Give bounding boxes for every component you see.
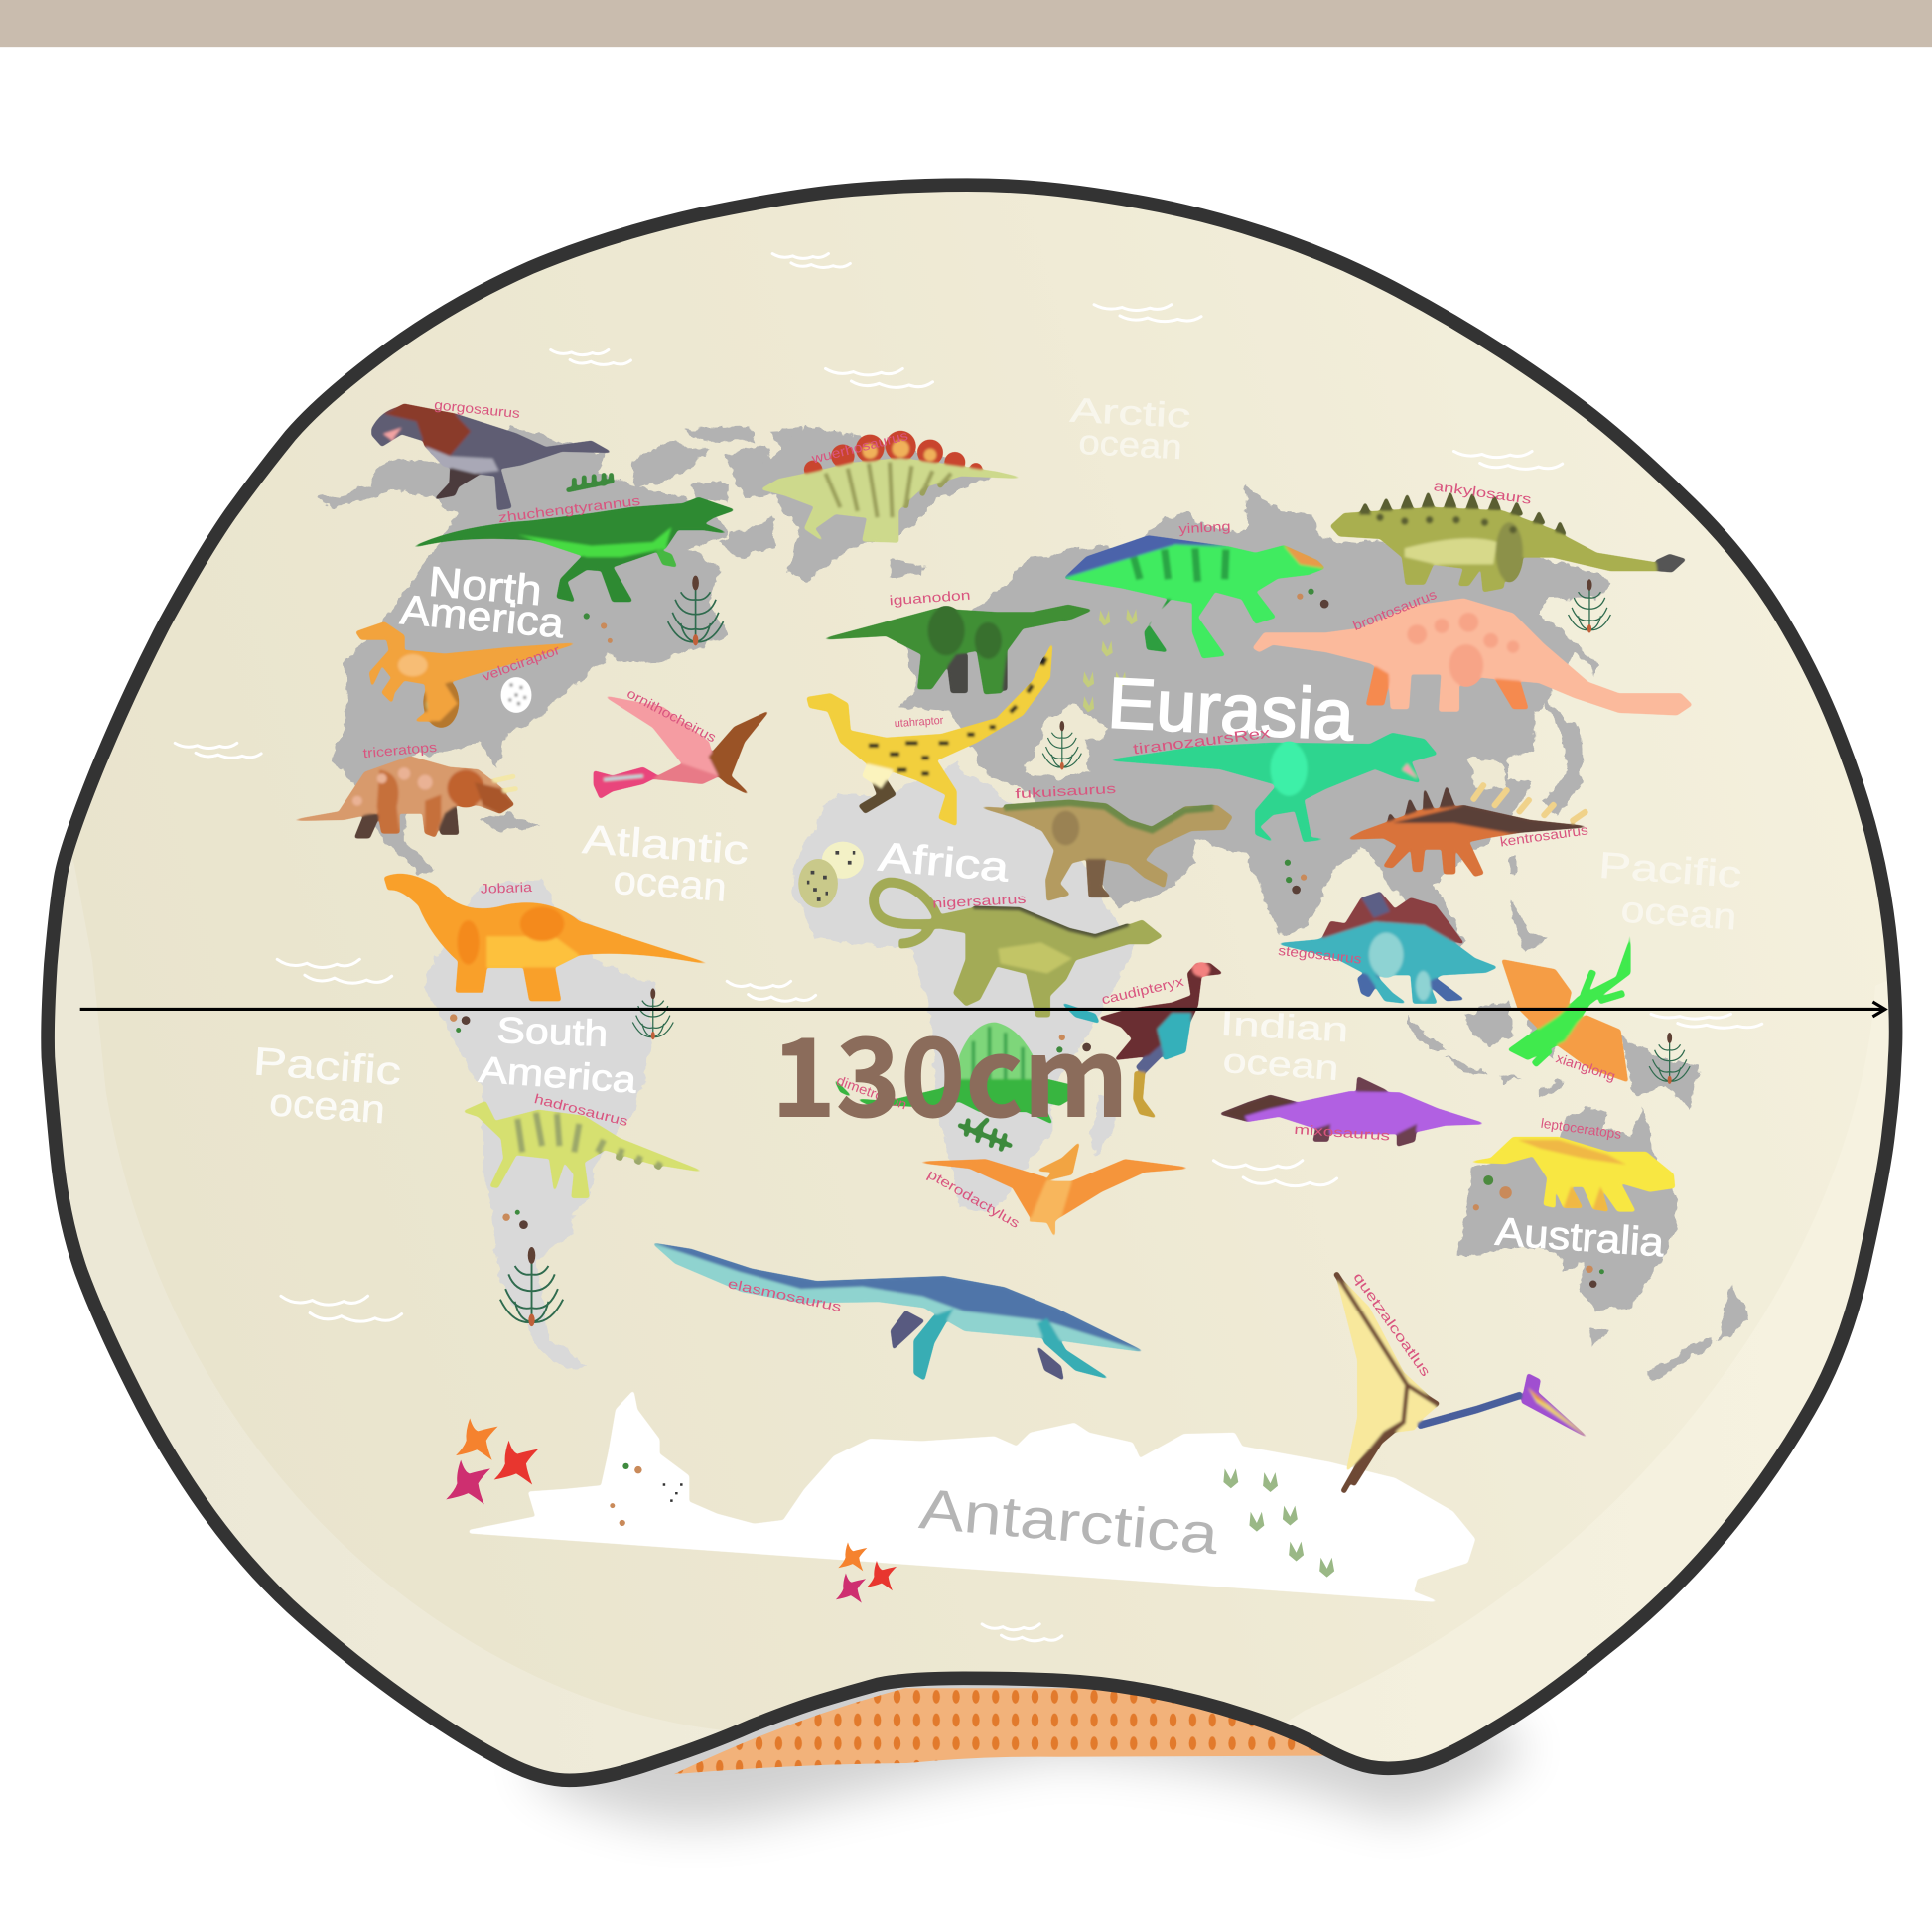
footprints on Eurasia bbox=[1083, 609, 1138, 712]
dinosaur name labels: xianglong bbox=[1554, 1050, 1617, 1084]
dinosaur name labels: hadrosaurus bbox=[533, 1091, 629, 1129]
quetzalcoatlus bbox=[1335, 1273, 1588, 1492]
ankylosaurus bbox=[1330, 491, 1686, 592]
dinosaur name labels: velociraptor bbox=[481, 642, 562, 684]
South East Asia islands bbox=[1406, 986, 1563, 1099]
continent labels: North bbox=[427, 558, 544, 614]
continent labels bbox=[398, 558, 1666, 1567]
diameter arrow bbox=[80, 1002, 1885, 1017]
North America bbox=[314, 425, 730, 874]
ocean labels: ocean bbox=[612, 857, 728, 910]
leptoceratops bbox=[1468, 1138, 1675, 1211]
caudipteryx bbox=[1062, 963, 1222, 1118]
ornithocheirus bbox=[594, 696, 768, 798]
starfish cluster left bbox=[446, 1418, 538, 1504]
dinosaur name labels: stegosaurus bbox=[1278, 943, 1362, 967]
ocean labels: Arctic bbox=[1069, 391, 1191, 436]
utahraptor bbox=[807, 643, 1052, 826]
wuerhosaurus bbox=[761, 431, 1023, 542]
dinosaur name labels: wuerhosaurus bbox=[809, 428, 909, 467]
zhuchengtyrannus bbox=[410, 497, 735, 602]
nigersaurus bbox=[874, 883, 1162, 1017]
iguanodon bbox=[822, 605, 1092, 694]
dinosaur name labels: dimetrodon bbox=[834, 1073, 909, 1112]
ocean labels: Pacific bbox=[1597, 844, 1743, 896]
dimetrodon bbox=[834, 1023, 1074, 1124]
continent labels: Australia bbox=[1494, 1210, 1666, 1265]
dinosaur name labels: nigersaurus bbox=[932, 892, 1027, 911]
South America bbox=[425, 879, 655, 1370]
New Guinea bbox=[1621, 1037, 1699, 1108]
dinosaur name labels: tiranozaursRex bbox=[1132, 726, 1272, 759]
mat drop shadow bbox=[530, 1601, 1528, 1824]
dinosaur name labels: gorgosaurus bbox=[434, 397, 521, 421]
starfish cluster centre bbox=[836, 1542, 897, 1603]
jobaria bbox=[384, 874, 712, 1001]
horsetail plants bbox=[500, 576, 1690, 1326]
ocean labels: Atlantic bbox=[581, 816, 751, 873]
Antarctica bbox=[470, 1391, 1475, 1601]
dinosaur name labels: pterodactylus bbox=[925, 1167, 1023, 1231]
dinosaur name labels: mixosaurus bbox=[1294, 1122, 1391, 1144]
Madagascar bbox=[1092, 1095, 1119, 1157]
fern above North America bbox=[567, 474, 614, 490]
Iceland bbox=[891, 559, 924, 577]
ocean waves bbox=[175, 254, 1762, 1641]
Eurasia bbox=[900, 486, 1610, 973]
continent labels: Eurasia bbox=[1106, 663, 1357, 756]
Australia bbox=[1458, 1106, 1678, 1311]
small fern on Africa bbox=[959, 1119, 1012, 1151]
fukuisaurus bbox=[980, 801, 1232, 900]
hadrosaurus bbox=[464, 1102, 704, 1197]
brontosaurus bbox=[1253, 599, 1692, 715]
mixosaurus bbox=[1220, 1077, 1484, 1146]
dinosaur name labels: kentrosaurus bbox=[1499, 822, 1589, 850]
dinosaur name labels: leptoceratops bbox=[1540, 1116, 1622, 1142]
round mat bbox=[55, 192, 1889, 1773]
size label 130cm: 130cm bbox=[771, 991, 1129, 1148]
ocean labels: Pacific bbox=[252, 1039, 402, 1094]
pterodactylus bbox=[916, 1142, 1190, 1237]
ocean labels: ocean bbox=[1619, 888, 1738, 937]
xianglong bbox=[1502, 926, 1630, 1082]
top beige band bbox=[0, 0, 1932, 47]
dinosaur name labels: triceratops bbox=[362, 740, 438, 760]
orange underside of the mat bbox=[674, 1688, 1330, 1774]
continent labels: Africa bbox=[877, 833, 1011, 891]
continent labels: Antarctica bbox=[916, 1477, 1221, 1567]
dinosaur name labels: brontosaurus bbox=[1351, 587, 1439, 633]
ocean labels: Indian bbox=[1219, 1006, 1349, 1049]
kentrosaurus bbox=[1348, 783, 1588, 876]
eggs near Africa bbox=[798, 842, 864, 908]
Caribbean islands bbox=[481, 813, 543, 830]
dinosaur name labels: iguanodon bbox=[889, 588, 971, 608]
inland seas bbox=[1023, 705, 1506, 788]
stegosaurus bbox=[1278, 893, 1497, 1003]
continent labels: South bbox=[496, 1009, 609, 1054]
yinlong bbox=[1064, 536, 1324, 658]
mat black border bbox=[48, 185, 1896, 1780]
dinosaur name labels: ornithocheirus bbox=[624, 686, 719, 746]
dinosaur name labels: elasmosaurus bbox=[727, 1276, 843, 1314]
dinosaur name labels: fukuisaurus bbox=[1015, 781, 1117, 801]
dinosaur name labels: yinlong bbox=[1178, 519, 1231, 536]
New Zealand and Tasmania bbox=[1589, 1285, 1751, 1380]
continent labels: America bbox=[478, 1048, 638, 1101]
triceratops bbox=[291, 757, 517, 838]
ocean labels: ocean bbox=[1078, 424, 1183, 467]
elasmosaurus bbox=[653, 1243, 1144, 1380]
dinosaur name labels: Jobaria bbox=[481, 880, 533, 897]
map land bbox=[314, 425, 1751, 1380]
dinosaur name labels bbox=[362, 397, 1622, 1379]
ocean labels: ocean bbox=[268, 1080, 386, 1132]
dinosaur name labels: caudipteryx bbox=[1100, 974, 1185, 1007]
Africa bbox=[791, 763, 1135, 1211]
ocean labels bbox=[252, 391, 1743, 1132]
fossil pebbles bbox=[450, 589, 1604, 1526]
dinosaur name labels: zhuchengtyrannus bbox=[497, 493, 641, 525]
Greenland bbox=[763, 426, 997, 582]
ocean labels: ocean bbox=[1222, 1042, 1340, 1088]
dinosaur name labels: utahraptor bbox=[894, 715, 944, 730]
footprints on Antarctica bbox=[1223, 1468, 1334, 1578]
Arctic islands bbox=[632, 426, 801, 557]
tyrannosaurus rex bbox=[1109, 733, 1437, 842]
gorgosaurus bbox=[372, 404, 612, 510]
continent labels: America bbox=[398, 586, 566, 646]
dinosaur name labels: quetzalcoatlus bbox=[1350, 1270, 1434, 1379]
velociraptor bbox=[356, 622, 577, 727]
dinosaur name labels: ankylosaurs bbox=[1433, 479, 1533, 507]
dinosaurs bbox=[291, 404, 1692, 1492]
egg bbox=[501, 678, 531, 712]
Japan and East Asia islands bbox=[1508, 690, 1584, 951]
